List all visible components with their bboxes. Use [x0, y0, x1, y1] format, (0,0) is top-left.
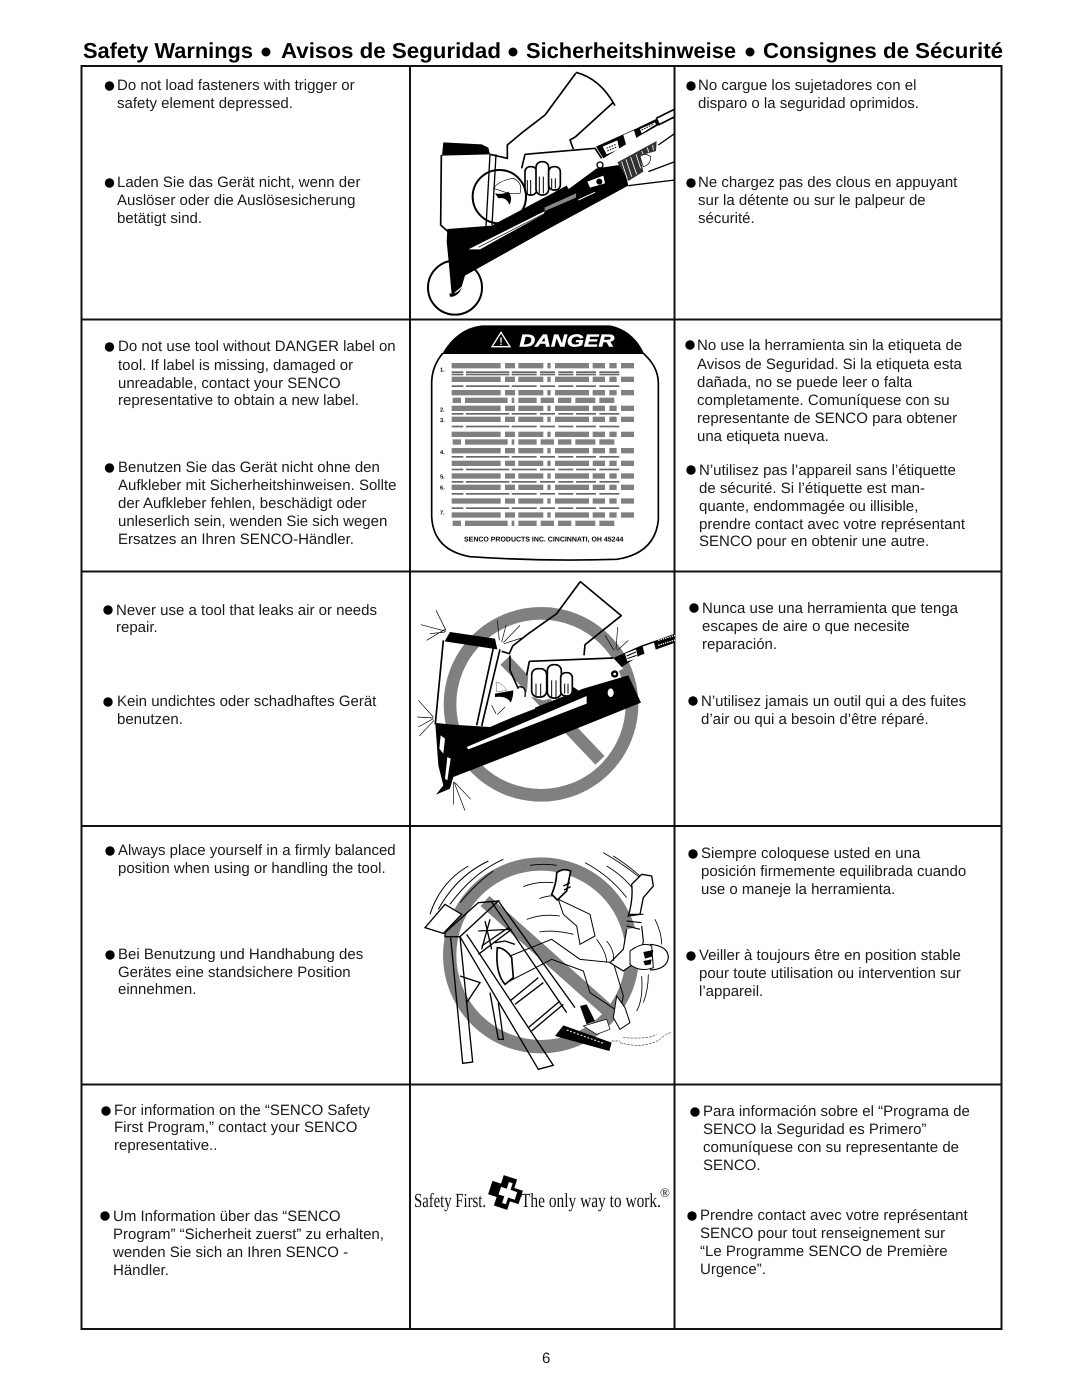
panel: row 4 left text: Gerätes eine standsichere Position [118, 964, 351, 981]
panel: row 4 left text: einnehmen. [118, 981, 196, 998]
panel: row 3 right text: escapes de aire o que necesite [702, 618, 910, 635]
panel: row 3 right text: reparación. [702, 636, 777, 653]
panel: row 5 right text [687, 1103, 970, 1278]
panel: row 1 right text: Ne chargez pas des clous en appuyant [698, 174, 958, 191]
panel: row 1 right text: sécurité. [698, 210, 755, 227]
panel: row 5 right text: Para información sobre el “Programa de [703, 1103, 970, 1120]
panel: row 2 left text: representative to obtain a new label. [118, 392, 359, 409]
panel: row 2 left text: Ersatzes an Ihren SENCO-Händler. [118, 531, 354, 548]
illustration: danger label: 2. [440, 406, 445, 413]
panel: row 3 left text: repair. [116, 619, 158, 636]
panel: row 5 right text: SENCO pour tout renseignement sur [700, 1225, 945, 1242]
illustration: danger label: SENCO PRODUCTS INC. CINCINNATI, OH 45244 [464, 536, 623, 543]
illustration: danger label: 3. [440, 417, 445, 423]
illustration: danger label: 7. [440, 510, 445, 516]
panel: row 4 left text [105, 842, 396, 998]
panel: row 3 right text: Nunca use una herramienta que tenga [702, 600, 959, 617]
logo: Safety First slogan: The only way to work. [521, 1190, 661, 1212]
title: Sicherheitshinweise [526, 38, 736, 63]
panel: row 4 left text: Always place yourself in a firmly balanced [118, 842, 396, 859]
panel: row 5 left text: representative.. [114, 1137, 217, 1154]
panel: row 4 right text: use o maneje la herramienta. [701, 881, 895, 898]
panel: row 2 left text: tool. If label is missing, damaged or [118, 357, 353, 374]
panel: row 5 left text: wenden Sie sich an Ihren SENCO - [112, 1244, 348, 1261]
panel: row 4 right text: posición firmemente equilibrada cuando [701, 863, 966, 880]
panel: row 3 right text: d’air ou qui a besoin d’être réparé. [701, 711, 929, 728]
panel: row 2 right text: quante, endommagée ou illisible, [699, 498, 918, 515]
illustration: danger label: 5. [440, 474, 445, 480]
panel: row 2 left text: unreadable, contact your SENCO [118, 375, 341, 392]
logo: Safety First slogan: ® [660, 1185, 670, 1200]
panel: row 2 right text: de sécurité. Si l’étiquette est man- [699, 480, 925, 497]
panel: row 1 left text: Do not load fasteners with trigger or [117, 77, 355, 94]
panel: row 2 right text [685, 337, 966, 550]
panel: row 2 right text: representante de SENCO para obtener [697, 410, 957, 427]
panel: row 4 right text: Siempre coloquese usted en una [701, 845, 921, 862]
panel: row 2 left text: Do not use tool without DANGER label on [118, 338, 396, 355]
icon: cross [485, 1172, 526, 1213]
illustration: person falling from ladder with prohibition sign [425, 853, 672, 1069]
panel: row 2 right text: dañada, no se puede leer o falta [697, 374, 913, 391]
panel: row 3 left text: benutzen. [117, 711, 183, 728]
panel: row 4 right text [686, 845, 966, 1000]
panel: row 2 right text: una etiqueta nueva. [697, 428, 829, 445]
panel: row 4 left text: Bei Benutzung und Handhabung des [118, 946, 363, 963]
panel: row 2 left text: Benutzen Sie das Gerät nicht ohne den [118, 459, 380, 476]
panel: row 2 right text: No use la herramienta sin la etiqueta de [697, 337, 962, 354]
panel: row 2 left text: der Aufkleber fehlen, beschädigt oder [118, 495, 367, 512]
panel: row 5 left text: Um Information über das “SENCO [113, 1208, 341, 1225]
panel: row 5 left text [100, 1102, 384, 1279]
panel: row 5 right text: “Le Programme SENCO de Première [700, 1243, 948, 1260]
illustration: leaking nail gun with prohibition sign [417, 581, 675, 811]
logo: Safety First slogan [414, 1172, 670, 1213]
panel: row 3 left text: Kein undichtes oder schadhaftes Gerät [117, 693, 377, 710]
title: Avisos de Seguridad [281, 38, 501, 63]
title: Consignes de Sécurité [763, 38, 1003, 63]
panel: row 5 right text: SENCO la Seguridad es Primero” [703, 1121, 926, 1138]
panel: row 4 right text: l’appareil. [699, 983, 763, 1000]
illustration: danger label: 1. [440, 366, 445, 373]
panel: row 1 left text: Auslöser oder die Auslösesicherung [117, 192, 355, 209]
panel: row 3 right text [688, 600, 966, 728]
panel: row 1 left text: safety element depressed. [117, 95, 293, 112]
panel: row 3 left text: Never use a tool that leaks air or needs [116, 602, 377, 619]
panel: row 3 right text: N’utilisez jamais un outil qui a des fuites [701, 693, 966, 710]
logo: Safety First slogan: Safety First. [414, 1190, 486, 1212]
panel: row 2 right text: completamente. Comuníquese con su [697, 392, 950, 409]
panel: row 3 left text [103, 602, 377, 728]
title: Safety Warnings [83, 38, 253, 63]
panel: row 5 left text: Händler. [113, 1262, 169, 1279]
illustration: danger label [432, 325, 658, 560]
panel: row 2 right text: Avisos de Seguridad. Si la etiqueta esta [697, 356, 963, 373]
panel: row 2 right text: SENCO pour en obtenir une autre. [699, 533, 929, 550]
panel: row 1 right text: sur la détente ou sur le palpeur de [698, 192, 926, 209]
title [83, 38, 1003, 63]
panel: row 2 left text [105, 338, 396, 548]
illustration: nail gun with trigger and safety element circled [428, 72, 675, 315]
panel: row 2 right text: prendre contact avec votre représentant [699, 516, 966, 533]
panel: row 5 right text: Urgence”. [700, 1261, 766, 1278]
panel: row 5 left text: For information on the “SENCO Safety [114, 1102, 370, 1119]
illustration: danger label: DANGER [519, 331, 615, 351]
panel: row 1 left text: betätigt sind. [117, 210, 202, 227]
panel: row 4 right text: pour toute utilisation ou intervention sur [699, 965, 961, 982]
illustration: danger label: 4. [440, 449, 445, 455]
panel: row 1 left text [105, 77, 360, 227]
panel: row 1 right text: disparo o la seguridad oprimidos. [698, 95, 919, 112]
panel: row 2 left text: Aufkleber mit Sicherheitshinweisen. Sollte [118, 477, 396, 494]
illustration: danger label: 6. [440, 485, 445, 491]
panel: row 5 left text: First Program,” contact your SENCO [114, 1119, 357, 1136]
panel: row 2 right text: N’utilisez pas l’appareil sans l’étiquette [699, 462, 956, 479]
panel: row 4 left text: position when using or handling the tool. [118, 860, 386, 877]
panel: row 1 right text [686, 77, 958, 227]
panel: row 5 right text: comuníquese con su representante de [703, 1139, 959, 1156]
panel: row 1 left text: Laden Sie das Gerät nicht, wenn der [117, 174, 360, 191]
panel: row 4 right text: Veiller à toujours être en position stable [699, 947, 961, 964]
panel: row 1 right text: No cargue los sujetadores con el [698, 77, 916, 94]
panel: row 5 left text: Program” “Sicherheit zuerst” zu erhalten, [113, 1226, 384, 1243]
panel: row 2 left text: unleserlich sein, wenden Sie sich wegen [118, 513, 387, 530]
page number: 6 [542, 1350, 550, 1367]
panel: row 5 right text: SENCO. [703, 1157, 761, 1174]
panel: row 5 right text: Prendre contact avec votre représentant [700, 1207, 968, 1224]
table frame [82, 66, 1002, 1329]
